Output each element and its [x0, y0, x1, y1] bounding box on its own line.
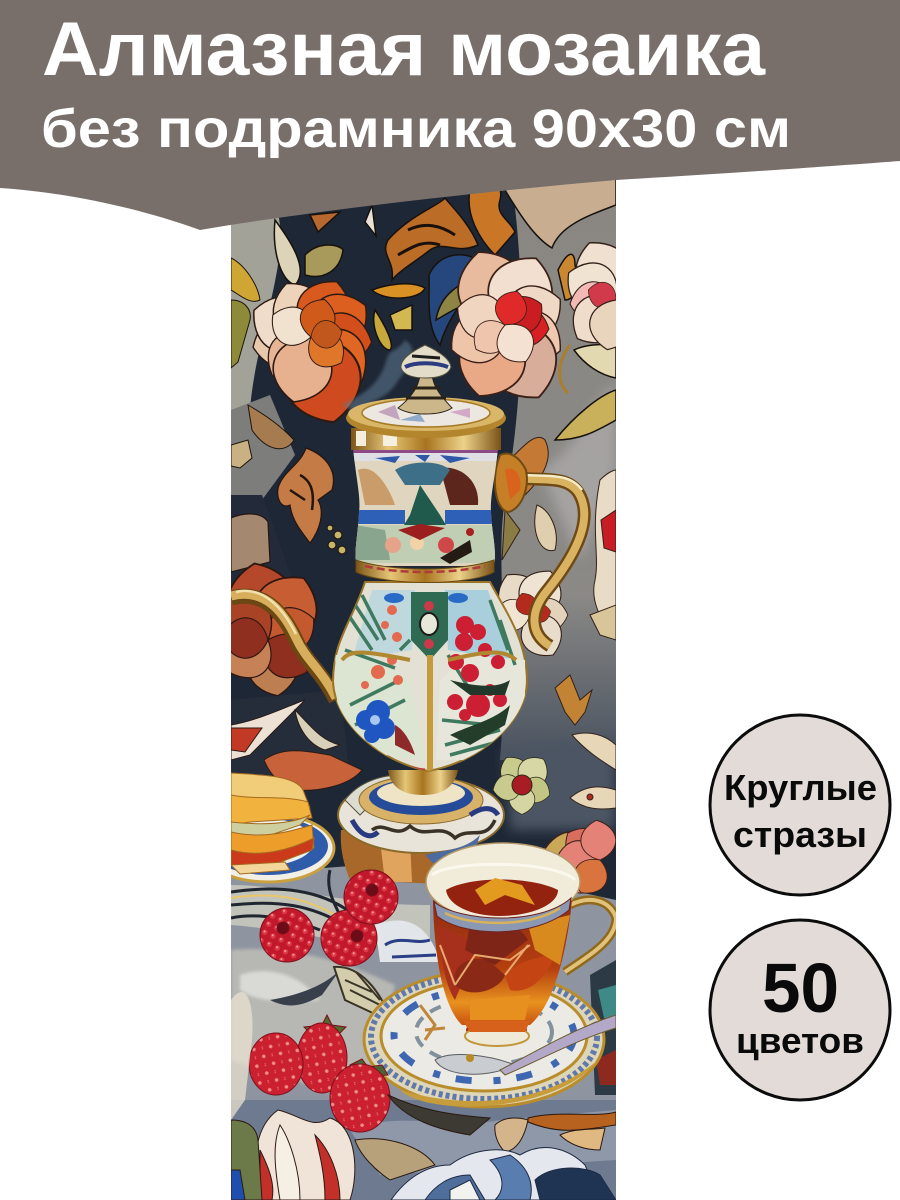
teapot lid [346, 345, 506, 450]
painting: tea still life [231, 180, 616, 1200]
flower: far right [567, 242, 616, 350]
red flowers [447, 616, 507, 721]
saucer [364, 971, 604, 1107]
small leaves right [570, 733, 616, 809]
leaf: bottom orange [355, 1095, 616, 1180]
teapot foot [338, 770, 504, 884]
flower: green-petalled right [492, 757, 550, 815]
fabric background [231, 170, 616, 1200]
leaf: brown centre left [231, 448, 346, 572]
badge: 50 colours [710, 920, 890, 1100]
flower: pink right [544, 820, 616, 894]
floral: scroll leaves top [274, 173, 616, 440]
flower: upper middle [451, 251, 561, 398]
teapot gold ring [356, 560, 494, 582]
subtitle: без подрамника 90х30 см [41, 99, 791, 159]
pink flowers [361, 605, 403, 689]
flower: bottom blue and white [391, 1148, 616, 1200]
teapot spout [231, 591, 336, 700]
left edge leaves [231, 258, 294, 468]
steam [342, 340, 412, 412]
leafy sprays [345, 595, 515, 755]
flower: upper left [252, 281, 372, 424]
badge: round rhinestones: Круглые [724, 767, 877, 808]
cup [426, 843, 580, 1046]
pancake plate [231, 819, 336, 884]
flower: far right edge [500, 437, 616, 725]
teapot body [333, 582, 527, 773]
badge: 50 colours: 50 [762, 949, 839, 1027]
badge: 50 colours: цветов [736, 1020, 864, 1061]
badge: round rhinestones: стразы [733, 814, 867, 855]
pancake stack [231, 773, 314, 874]
teapot handle [495, 453, 584, 646]
cup handle [565, 900, 616, 972]
title: Алмазная мозаика [42, 7, 766, 92]
blue flower [356, 700, 395, 743]
fabric shadow [231, 992, 253, 1120]
flower: lower left [231, 562, 318, 696]
strawberries [249, 1015, 390, 1132]
header banner [0, 0, 900, 230]
teapot neck [350, 447, 500, 566]
raspberries [260, 870, 398, 966]
flower: bottom-left strip of lower fabric [231, 700, 362, 790]
flower: cream right of teapot [498, 570, 568, 656]
feather leaf [332, 966, 383, 1014]
flower: bottom cream and red [231, 1110, 355, 1200]
badge: round rhinestones [710, 715, 890, 895]
spoon [435, 1015, 616, 1075]
